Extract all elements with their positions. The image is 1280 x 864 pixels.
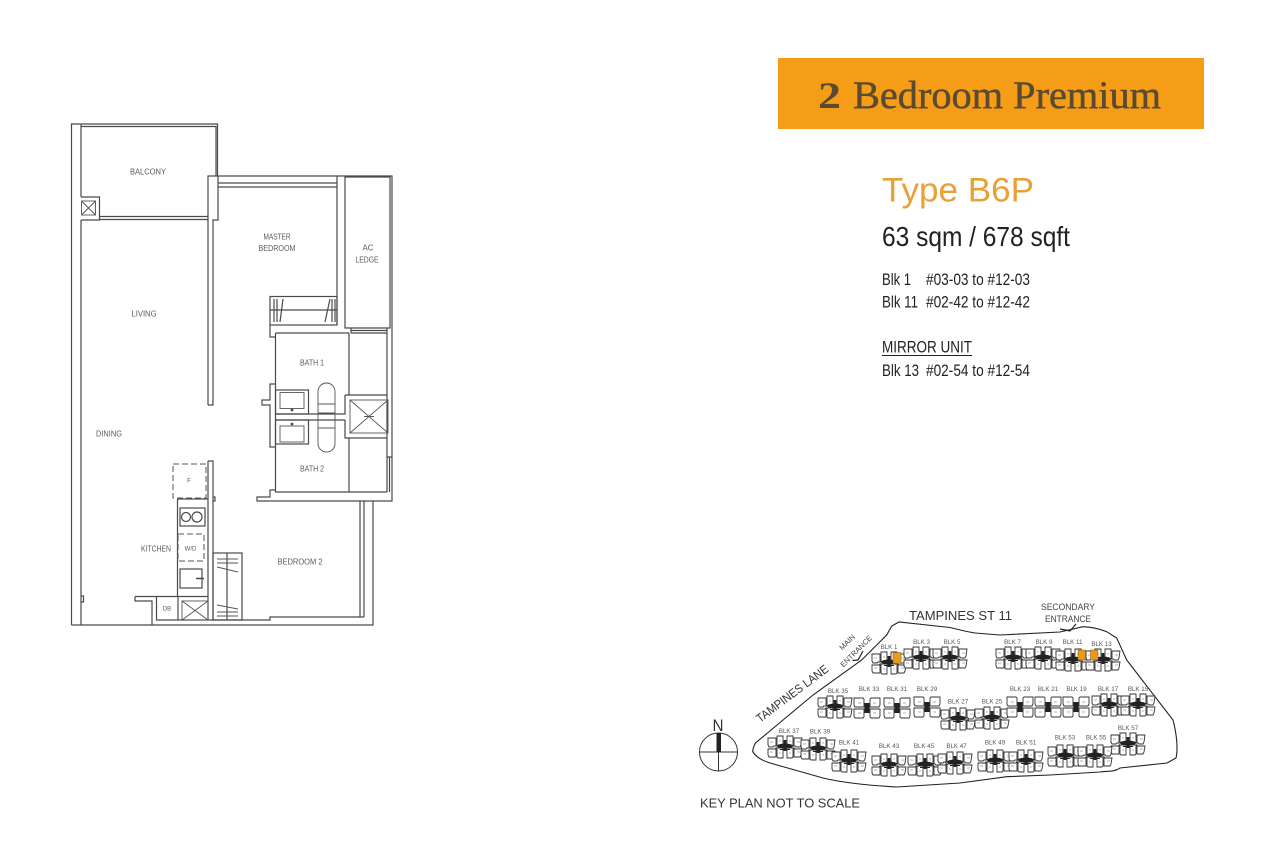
room labels: BEDROOM 2 <box>278 556 323 566</box>
unit numbers: #02-42 to #12-42 <box>926 292 1030 312</box>
room labels: BATH 1 <box>300 358 324 368</box>
room labels: LIVING <box>132 308 156 318</box>
block: BLK 23 <box>1007 686 1033 717</box>
block: BLK 7 <box>996 639 1030 669</box>
north compass: N <box>712 716 724 735</box>
block: BLK 29 <box>914 686 940 717</box>
block: BLK 55: BLK 55 <box>1086 734 1107 742</box>
block: BLK 49: BLK 49 <box>985 740 1006 746</box>
room labels: BEDROOM <box>258 243 296 253</box>
block: BLK 37: BLK 37 <box>779 728 800 735</box>
title banner: 2 <box>818 76 841 117</box>
balcony shaft <box>82 201 96 215</box>
block: BLK 21 <box>1035 686 1061 717</box>
block: BLK 47: BLK 47 <box>946 743 967 750</box>
unit numbers: Blk 11 <box>882 292 918 312</box>
block: BLK 37 <box>768 728 802 758</box>
key plan <box>700 602 1177 810</box>
block: BLK 39: BLK 39 <box>810 728 831 736</box>
block: BLK 11 <box>1056 639 1090 671</box>
room labels: F <box>187 478 191 484</box>
room labels: DB <box>163 606 171 612</box>
walls and structure <box>72 124 392 625</box>
block: BLK 5: BLK 5 <box>944 639 961 646</box>
highlighted units <box>893 650 1098 664</box>
block: BLK 13: BLK 13 <box>1091 641 1112 648</box>
unit numbers <box>882 270 1030 312</box>
block: BLK 21: BLK 21 <box>1038 686 1059 693</box>
block: BLK 9 <box>1026 639 1060 669</box>
block: BLK 15: BLK 15 <box>1128 686 1149 693</box>
block: BLK 11: BLK 11 <box>1063 639 1083 646</box>
block: BLK 33: BLK 33 <box>859 686 880 693</box>
floor plan <box>72 124 392 625</box>
bedroom 2 wardrobe <box>213 553 242 620</box>
secondary entrance label <box>1041 602 1095 631</box>
block: BLK 45 <box>908 743 942 776</box>
bath shaft <box>350 400 388 433</box>
mirror unit <box>882 338 1030 380</box>
block: BLK 35 <box>818 688 852 718</box>
unit details <box>882 172 1070 380</box>
room labels: W/D <box>185 546 197 552</box>
block: BLK 19 <box>1063 686 1089 717</box>
block: BLK 17 <box>1092 686 1126 716</box>
block: BLK 41: BLK 41 <box>839 740 860 746</box>
block: BLK 17: BLK 17 <box>1098 686 1119 693</box>
block: BLK 3 <box>904 639 938 669</box>
block: BLK 27: BLK 27 <box>948 698 969 706</box>
main entrance label: MAIN <box>837 632 857 652</box>
mirror unit: MIRROR UNIT <box>882 338 972 356</box>
block: BLK 5 <box>933 639 967 669</box>
block: BLK 19: BLK 19 <box>1066 686 1087 693</box>
north compass <box>700 716 738 771</box>
unit numbers: Blk 1 <box>882 270 911 289</box>
block: BLK 29: BLK 29 <box>917 686 938 693</box>
block: BLK 27 <box>941 698 975 730</box>
unit type: Type B6P <box>882 172 1034 210</box>
block: BLK 23: BLK 23 <box>1010 686 1031 693</box>
master bedroom wardrobe <box>270 296 337 325</box>
block: BLK 43 <box>872 743 906 776</box>
room labels: BATH 2 <box>300 464 324 474</box>
mirror unit: #02-54 to #12-54 <box>926 361 1030 380</box>
block: BLK 7: BLK 7 <box>1004 639 1021 646</box>
title banner: Bedroom Premium <box>853 74 1161 117</box>
block: BLK 33 <box>854 686 880 718</box>
block: BLK 25 <box>975 698 1009 729</box>
secondary entrance label: SECONDARY <box>1041 602 1095 612</box>
key plan caption: KEY PLAN NOT TO SCALE <box>700 796 860 810</box>
unit numbers: #03-03 to #12-03 <box>926 270 1030 289</box>
title banner <box>778 58 1204 129</box>
kitchen sink <box>180 569 204 588</box>
main entrance label: ENTRANCE <box>838 633 874 669</box>
room labels: KITCHEN <box>141 544 171 554</box>
room labels: MASTER <box>264 232 290 242</box>
block: BLK 9: BLK 9 <box>1036 639 1053 646</box>
block: BLK 45: BLK 45 <box>914 743 935 750</box>
mirror unit: Blk 13 <box>882 361 919 380</box>
road label: Tampines St 11: TAMPINES ST 11 <box>909 609 1012 623</box>
site boundary <box>753 622 1177 787</box>
block connectors <box>929 654 1130 769</box>
block: BLK 51: BLK 51 <box>1016 740 1037 746</box>
block: BLK 13 <box>1086 641 1120 671</box>
room labels <box>96 166 379 612</box>
room labels: LEDGE <box>356 254 379 264</box>
room labels: DINING <box>96 428 122 438</box>
block: BLK 51 <box>1009 740 1043 772</box>
washer dryer <box>178 534 204 561</box>
block: BLK 41 <box>832 740 866 772</box>
road label: Tampines Lane: TAMPINES LANE <box>753 662 831 725</box>
kitchen fridge <box>173 464 206 498</box>
block: BLK 1 <box>872 644 906 674</box>
block: BLK 53: BLK 53 <box>1055 734 1076 742</box>
block: BLK 39 <box>801 728 835 760</box>
block: BLK 57: BLK 57 <box>1118 725 1139 732</box>
block: BLK 3: BLK 3 <box>913 639 930 646</box>
block: BLK 47 <box>938 743 972 774</box>
block: BLK 35: BLK 35 <box>828 688 849 695</box>
room labels: AC <box>362 242 374 252</box>
bath fittings <box>276 383 335 452</box>
secondary entrance label: ENTRANCE <box>1045 614 1091 624</box>
kitchen hob <box>180 508 205 526</box>
block: BLK 55 <box>1078 734 1112 767</box>
block: BLK 53 <box>1048 734 1082 767</box>
block: BLK 49 <box>978 740 1012 772</box>
block: BLK 43: BLK 43 <box>879 743 900 750</box>
block: BLK 15 <box>1121 686 1155 716</box>
block: BLK 1: BLK 1 <box>881 644 898 651</box>
block: BLK 57 <box>1111 725 1145 755</box>
block: BLK 25: BLK 25 <box>982 698 1003 706</box>
unit area: 63 sqm / 678 sqft <box>882 221 1070 252</box>
service shaft <box>182 601 208 620</box>
room labels: BALCONY <box>130 166 166 176</box>
block: BLK 31: BLK 31 <box>887 686 908 693</box>
block: BLK 31 <box>884 686 910 718</box>
